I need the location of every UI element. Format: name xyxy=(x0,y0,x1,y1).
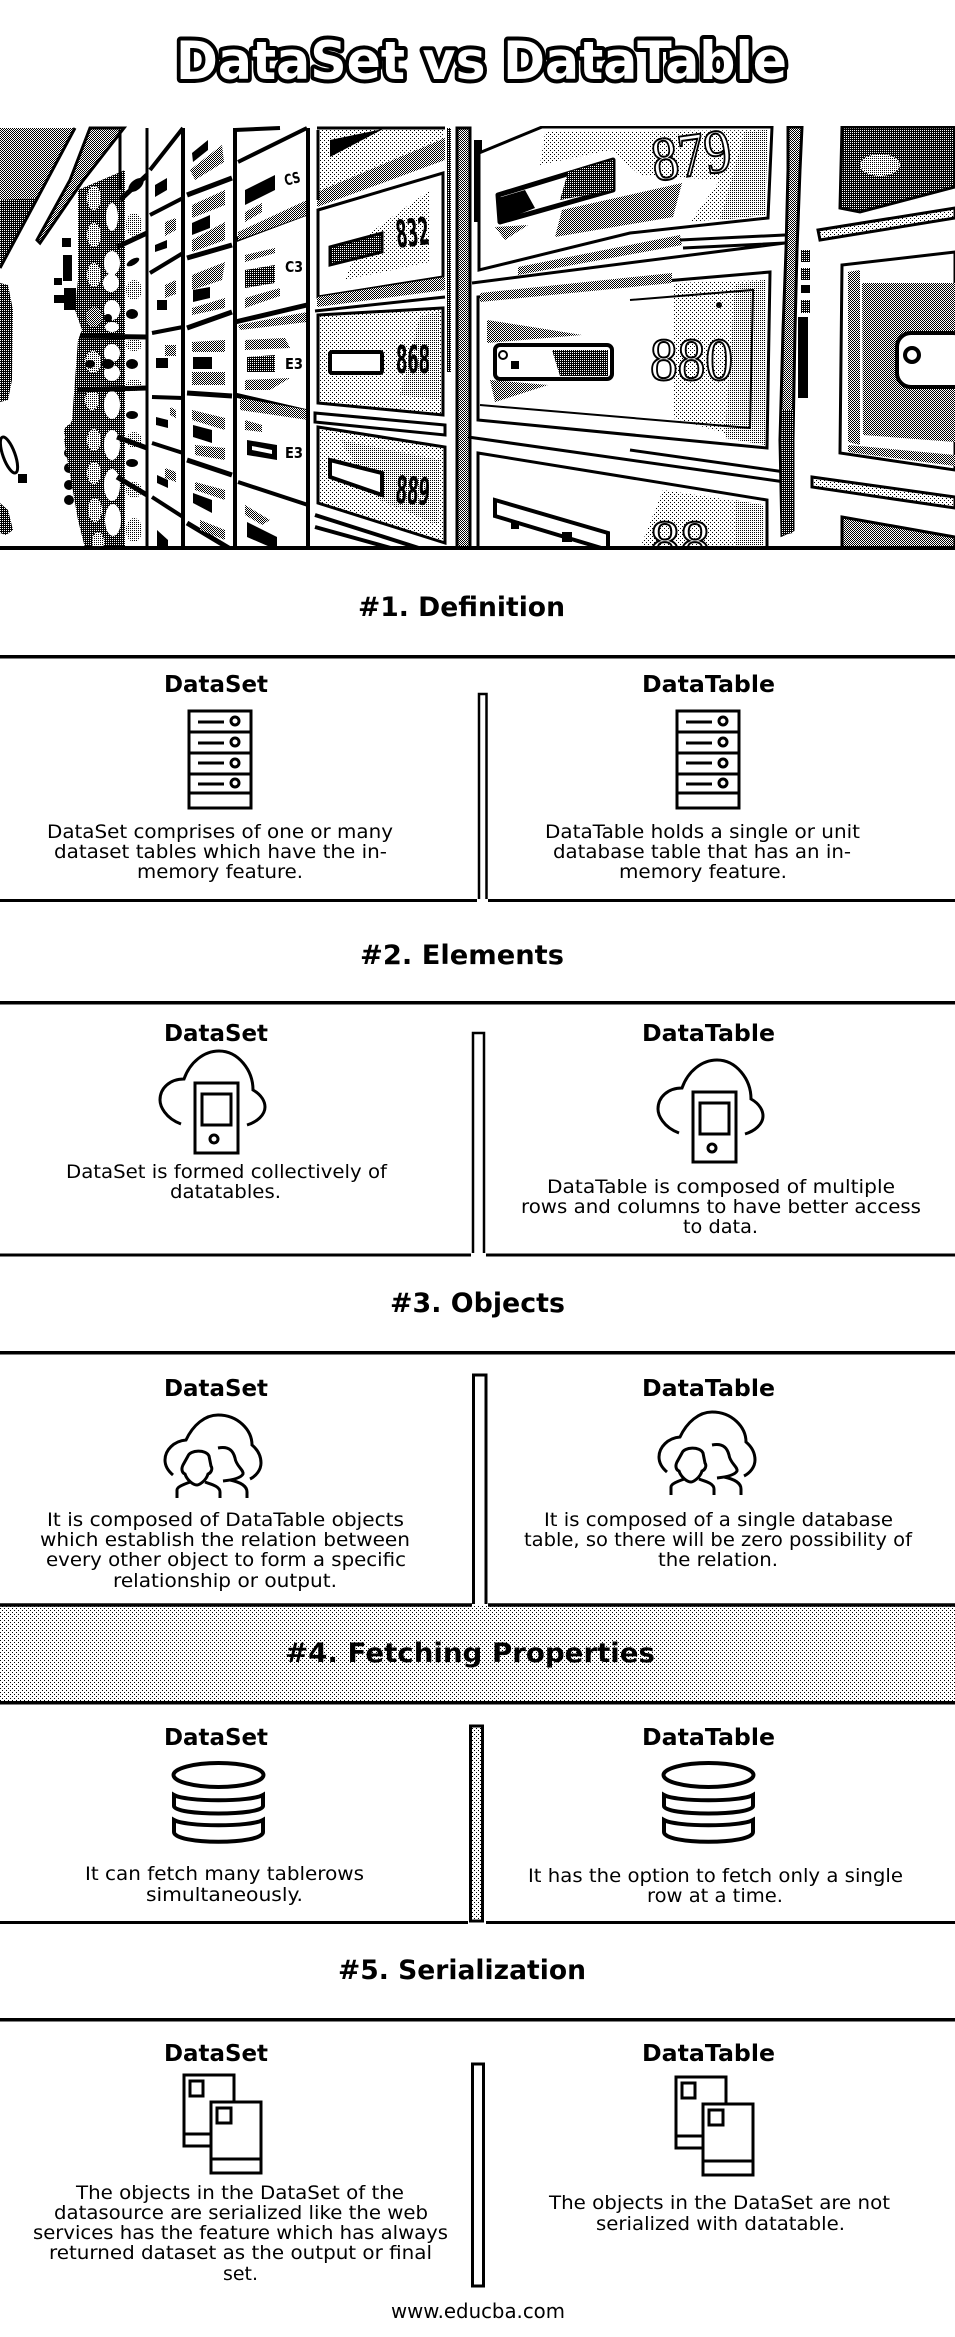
column heading: dataset: DataSet xyxy=(164,1725,268,1751)
text: dataset elements: datatables. xyxy=(170,1181,281,1203)
text: datatable elements: DataTable is composed of multiple xyxy=(547,1176,895,1198)
column heading: datatable: DataTable xyxy=(642,1021,775,1047)
column heading: datatable: DataTable xyxy=(642,2041,775,2067)
photo: central vertical strip xyxy=(447,128,482,548)
text: dataset objects: which establish the relation between xyxy=(40,1529,410,1551)
text: dataset objects xyxy=(40,1509,410,1592)
photo: box 879: 879 xyxy=(647,117,736,195)
photo: left wedges and blobs xyxy=(0,128,124,535)
text: datatable objects: table, so there will be zero possibility of xyxy=(524,1529,913,1551)
text: dataset serialization xyxy=(33,2182,448,2285)
divider xyxy=(470,1726,482,1921)
text: dataset fetching: simultaneously. xyxy=(146,1884,303,1906)
text: dataset serialization: The objects in the DataSet of the xyxy=(75,2182,404,2204)
photo: small mailbox columns xyxy=(150,128,235,550)
text: datatable objects: the relation. xyxy=(658,1549,778,1571)
text: datatable fetching: It has the option to fetch only a single xyxy=(528,1865,903,1887)
divider xyxy=(473,1033,484,1253)
text: datatable serialization: serialized with datatable. xyxy=(596,2213,845,2235)
icon: database left xyxy=(174,1763,264,1842)
photo: lower box xyxy=(476,451,768,546)
photo: mailbox column with stippled slots: E3 xyxy=(285,444,303,462)
icon: cloud people right xyxy=(659,1412,755,1495)
text: dataset elements: DataSet is formed collectively of xyxy=(66,1161,388,1183)
photo: mailbox column with stippled slots: E3 xyxy=(285,355,303,373)
text: dataset definition: memory feature. xyxy=(137,861,303,883)
heading: definition: #1. Definition xyxy=(358,592,565,623)
photo: mailbox column with stippled slots: CS xyxy=(282,168,302,190)
text: datatable serialization xyxy=(548,2192,890,2235)
heading: elements: #2. Elements xyxy=(360,940,564,971)
photo: box 880 xyxy=(468,272,785,482)
column heading: datatable: DataTable xyxy=(642,1376,775,1402)
title: DataSet vs DataTable xyxy=(176,31,787,92)
column heading: datatable: DataTable xyxy=(642,1725,775,1751)
text: datatable definition: memory feature. xyxy=(619,861,787,883)
stippled heading band xyxy=(0,1605,955,1703)
photo: box 868 column: 868 xyxy=(396,338,430,382)
photo: far-left column of mailboxes xyxy=(64,128,147,552)
hero photo: dithered mailboxes xyxy=(0,117,955,575)
photo: box 868 column: 832 xyxy=(394,209,431,257)
column heading: dataset: DataSet xyxy=(164,2041,268,2067)
icon: cloud phone left xyxy=(160,1051,265,1153)
icon: cloud people left xyxy=(165,1415,261,1498)
icon: server right xyxy=(677,711,739,808)
column heading: datatable: DataTable xyxy=(642,672,775,698)
section 5: serialization xyxy=(0,1955,955,2286)
text: dataset definition: dataset tables which have the in- xyxy=(54,841,387,863)
divider xyxy=(474,1375,486,1604)
icon: server left xyxy=(189,711,251,808)
photo: box 879 xyxy=(472,117,785,283)
section 4: fetching properties xyxy=(0,1375,955,1922)
text: dataset objects: relationship or output. xyxy=(113,1570,337,1592)
text: dataset fetching: It can fetch many tablerows xyxy=(85,1863,364,1885)
heading: objects: #3. Objects xyxy=(390,1288,565,1319)
text: dataset objects: It is composed of DataTable objects xyxy=(47,1509,404,1531)
photo: mailbox column with stippled slots: C3 xyxy=(285,258,303,276)
text: datatable fetching: row at a time. xyxy=(647,1885,783,1907)
heading: fetching properties: #4. Fetching Properties xyxy=(285,1638,655,1669)
column heading: dataset: DataSet xyxy=(164,672,268,698)
photo: bottom rule xyxy=(0,546,955,550)
text: dataset definition: DataSet comprises of one or many xyxy=(47,821,393,843)
text: dataset objects: every other object to form a specific xyxy=(46,1549,406,1571)
photo: box 880: 880 xyxy=(650,327,733,393)
photo: box 868 column xyxy=(315,128,445,550)
text: datatable definition: DataTable holds a single or unit xyxy=(545,821,860,843)
text: datatable elements xyxy=(521,1176,921,1238)
photo: mailbox column with stippled slots xyxy=(235,128,308,550)
text: dataset elements xyxy=(66,1161,388,1203)
photo: pole and side bars xyxy=(780,127,810,535)
text: datatable elements: rows and columns to have better access xyxy=(521,1196,921,1218)
text: datatable definition xyxy=(545,821,860,883)
column heading: dataset: DataSet xyxy=(164,1376,268,1402)
divider xyxy=(472,2064,484,2286)
text: datatable fetching xyxy=(528,1865,903,1907)
heading: serialization: #5. Serialization xyxy=(338,1955,586,1986)
text: datatable definition: database table that has an in- xyxy=(553,841,851,863)
text: dataset serialization: services has the feature which has always xyxy=(33,2222,448,2244)
photo: right boxes xyxy=(812,127,955,560)
text: datatable serialization: The objects in the DataSet are not xyxy=(548,2192,890,2214)
icon: documents left xyxy=(184,2075,261,2173)
text: dataset definition xyxy=(47,821,393,883)
text: datatable objects: It is composed of a single database xyxy=(544,1509,893,1531)
text: dataset serialization: set. xyxy=(223,2263,258,2285)
icon: documents right xyxy=(676,2077,753,2175)
icon: database right xyxy=(664,1763,754,1842)
column heading: dataset: DataSet xyxy=(164,1021,268,1047)
text: datatable objects xyxy=(524,1509,913,1571)
text: dataset serialization: returned dataset as the output or final xyxy=(49,2242,432,2264)
section 1: definition xyxy=(0,592,955,900)
text: dataset fetching xyxy=(85,1863,364,1906)
footer url: www.educba.com xyxy=(391,2299,565,2323)
icon: cloud phone right xyxy=(658,1060,763,1162)
section 3: objects xyxy=(0,1288,955,1592)
section 2: elements xyxy=(0,940,955,1255)
divider xyxy=(479,694,486,899)
photo: lower box: 88 xyxy=(650,509,710,575)
text: datatable elements: to data. xyxy=(683,1216,758,1238)
photo: box 868 column: 889 xyxy=(394,468,431,514)
text: dataset serialization: datasource are serialized like the web xyxy=(54,2202,428,2224)
